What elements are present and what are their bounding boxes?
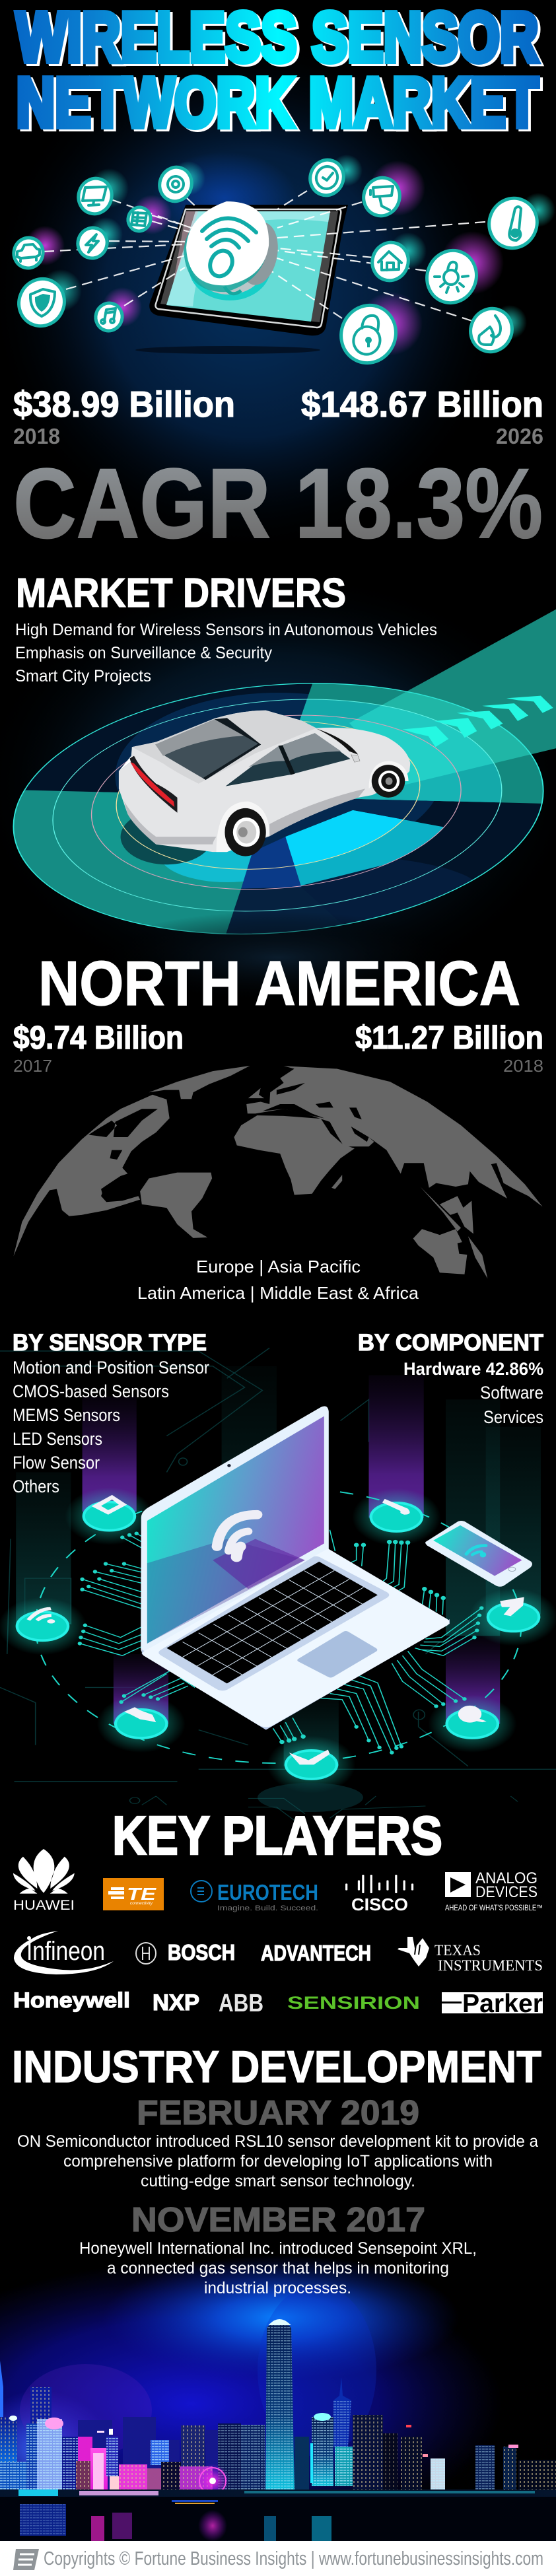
icon: thermometer <box>481 191 545 256</box>
list: components: Software <box>480 1383 543 1403</box>
logo: Bosch: BOSCH <box>168 1940 235 1965</box>
other regions <box>137 1257 419 1303</box>
Australia <box>413 1229 468 1274</box>
list: sensor types: MEMS Sensors <box>13 1405 120 1425</box>
development: February 2019: cutting-edge smart sensor technology. <box>141 2172 415 2190</box>
connector lines <box>44 191 485 321</box>
list: components: Hardware 42.86% <box>403 1359 543 1379</box>
British Isles <box>248 1088 264 1098</box>
waterfront and reflection <box>0 2489 556 2542</box>
illustration: tablet with connected sensor icons <box>11 152 555 371</box>
logo: Analog Devices: ANALOG <box>475 1869 538 1887</box>
radar sector: top right <box>300 684 543 804</box>
logo: TE Connectivity: connectivity <box>130 1902 153 1906</box>
panel: header and market size <box>0 0 555 559</box>
logo: Huawei: HUAWEI <box>13 1898 75 1913</box>
illustration: car with radar rings <box>13 609 556 950</box>
other regions: Europe | Asia Pacific <box>196 1257 361 1276</box>
list: drivers: Emphasis on Surveillance & Security <box>15 644 272 662</box>
logo: Texas Instruments: INSTRUMENTS <box>438 1957 543 1974</box>
beam <box>349 609 556 785</box>
heading: market drivers: MARKET DRIVERS <box>16 571 346 616</box>
development: February 2019: comprehensive platform for developing IoT applications with <box>63 2152 493 2171</box>
sky glow <box>0 2255 502 2546</box>
logo: Huawei <box>13 1849 75 1913</box>
footer <box>0 2541 556 2576</box>
list: sensor types: Others <box>13 1477 59 1496</box>
icon: water drops <box>464 302 519 359</box>
distant buildings <box>78 2417 218 2493</box>
market size 2026: $148.67 Billion <box>301 384 543 425</box>
stat: 2018: $11.27 Billion <box>355 1020 543 1056</box>
development: November 2017: industrial processes. <box>204 2279 351 2297</box>
logo: Sensirion: SENSIRION <box>287 1993 420 2013</box>
logo: Eurotech: EUROTECH <box>217 1880 318 1904</box>
list: sensor types <box>13 1358 209 1496</box>
list: drivers: Smart City Projects <box>15 667 151 685</box>
ferris wheel <box>195 2464 230 2498</box>
logo: Honeywell: Honeywell <box>13 1988 130 2012</box>
market size 2018 <box>13 384 235 448</box>
wheels <box>368 761 409 788</box>
circuit backdrop <box>0 1348 556 1782</box>
screen wifi symbol <box>217 1515 257 1557</box>
light columns <box>16 1366 541 1766</box>
logo: NXP: NXP <box>153 1990 199 2015</box>
touchpad <box>297 1631 377 1677</box>
illustration: laptop with sensor nodes <box>0 1348 556 1793</box>
list: sensor types: Motion and Position Sensor <box>13 1358 209 1377</box>
Southeast Asia islands <box>420 1187 487 1278</box>
panel: key players <box>13 1783 543 2018</box>
logo: Advantech: ADVANTECH <box>261 1941 371 1965</box>
logo: Cisco <box>347 1875 413 1914</box>
logo: Parker: Parker <box>462 1990 543 2018</box>
stat: 2017: $9.74 Billion <box>13 1020 184 1056</box>
Greenland <box>149 1066 250 1099</box>
stat: 2017 <box>13 1020 184 1076</box>
chevrons <box>402 696 553 747</box>
sensor nodes <box>17 1502 539 1779</box>
dashed ring <box>36 1487 521 1763</box>
icon: shield <box>11 271 72 333</box>
node glows <box>0 1487 556 1793</box>
heading: by component: BY COMPONENT <box>358 1330 543 1356</box>
icon: bolt <box>74 224 111 262</box>
market size 2018: $38.99 Billion <box>13 384 235 425</box>
circuit traces <box>78 1530 483 1755</box>
circuit fragments <box>130 1796 518 1821</box>
logo: Cisco: CISCO <box>351 1895 408 1914</box>
stat: 2018: 2018 <box>503 1056 543 1076</box>
icon: gear <box>155 162 196 206</box>
icon: camera <box>359 173 405 221</box>
tail light <box>130 756 177 813</box>
logo: Bosch <box>136 1940 235 1965</box>
Eurasia <box>246 1066 543 1206</box>
development: February 2019: ON Semiconductor introduced RSL10 sensor development kit to provide a <box>17 2132 538 2151</box>
smartphone <box>425 1521 532 1587</box>
icon: car <box>11 234 46 271</box>
logo: TE Connectivity: TE <box>127 1884 156 1904</box>
list: components: Services <box>483 1407 543 1427</box>
North America <box>13 1095 170 1256</box>
logo: Eurotech <box>191 1880 318 1912</box>
logo: Infineon <box>14 1931 114 1974</box>
stat: 2018 <box>355 1020 543 1076</box>
central tower <box>265 2320 295 2491</box>
icon: music <box>92 300 125 333</box>
radar sector: left <box>14 790 252 934</box>
rear window <box>155 719 261 780</box>
radar sector: bottom <box>241 837 301 889</box>
icon: home <box>367 238 413 285</box>
central wifi disc <box>184 201 283 300</box>
radar rings <box>13 667 543 950</box>
panel: regional analysis <box>13 911 543 1303</box>
logo: Analog Devices <box>445 1869 543 1912</box>
heading: by sensor type: BY SENSOR TYPE <box>13 1330 207 1356</box>
heading: key players: KEY PLAYERS <box>112 1805 442 1866</box>
icon: bulb <box>419 243 484 310</box>
logo: Texas Instruments: TEXAS <box>434 1942 481 1959</box>
development: November 2017: a connected gas sensor that helps in monitoring <box>107 2259 449 2278</box>
development: November 2017: Honeywell International Inc. introduced Sensepoint XRL, <box>79 2239 477 2258</box>
side windows <box>226 746 294 786</box>
list: sensor types: LED Sensors <box>13 1429 102 1449</box>
Africa and Madagascar <box>234 1115 355 1195</box>
market size 2026 <box>301 384 543 448</box>
icon: lock <box>333 297 404 371</box>
icon: clock <box>305 155 349 200</box>
list: drivers: High Demand for Wireless Sensors in Autonomous Vehicles <box>15 621 437 639</box>
logo: Analog Devices: DEVICES <box>475 1883 538 1901</box>
market size 2026: 2026 <box>496 424 543 448</box>
sensor icon bubbles <box>11 155 545 371</box>
car <box>119 711 410 856</box>
right skyline <box>295 2377 556 2493</box>
world map <box>13 1066 543 1278</box>
development: February 2019 <box>17 2094 538 2190</box>
icon glows <box>25 155 555 355</box>
node icons <box>26 1495 524 1764</box>
South America <box>140 1173 212 1238</box>
list: sensor types: CMOS-based Sensors <box>13 1381 169 1401</box>
left skyline <box>0 2361 265 2498</box>
panel: city skyline backdrop <box>0 2255 556 2546</box>
panel: market drivers <box>13 577 556 938</box>
radar sector: lower right <box>285 810 444 886</box>
logo: Texas Instruments <box>398 1937 543 1974</box>
other regions: Latin America | Middle East & Africa <box>137 1283 419 1303</box>
development: February 2019: FEBRUARY 2019 <box>137 2094 419 2132</box>
icon: monitor <box>74 174 116 218</box>
stat: 2017: 2017 <box>13 1056 52 1076</box>
keyboard <box>166 1562 378 1683</box>
panel: segmentation <box>0 1330 556 1793</box>
development: November 2017 <box>79 2201 477 2297</box>
tablet <box>152 207 345 333</box>
logo: Eurotech: Imagine. Build. Succeed. <box>217 1904 318 1912</box>
logo: Infineon: Infineon <box>26 1937 105 1966</box>
logo: TE Connectivity <box>103 1878 164 1910</box>
title <box>16 0 541 144</box>
market size 2018: 2018 <box>13 424 60 448</box>
panel: industry development <box>12 2042 541 2297</box>
development: November 2017: NOVEMBER 2017 <box>131 2201 425 2239</box>
icon: Fortune Business Insights logo <box>13 2549 39 2570</box>
list: components <box>403 1359 543 1427</box>
laptop <box>141 1407 450 1730</box>
list: drivers <box>15 621 437 685</box>
list: sensor types: Flow Sensor <box>13 1453 100 1473</box>
logo: ABB: ABB <box>219 1990 263 2017</box>
icon: panel <box>125 205 153 234</box>
